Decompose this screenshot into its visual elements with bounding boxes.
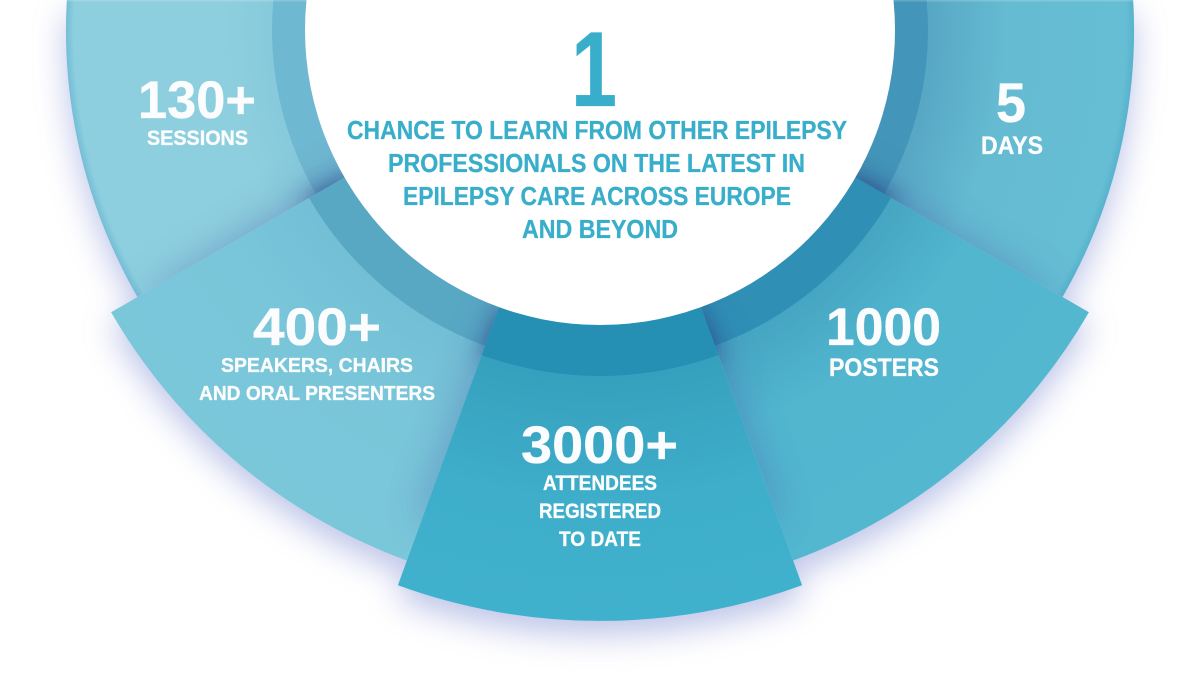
inner ring band (482, 302, 718, 376)
segment fill (66, 0, 400, 297)
panel: white centre circle (305, 0, 895, 325)
label line 2: REGISTERED (539, 500, 661, 523)
label posters: POSTERS (829, 354, 939, 382)
stat 1000: 1000 (826, 298, 941, 357)
panel: 1000 posters segment (701, 178, 1089, 560)
cast shadow from neighbouring segment (856, 162, 1051, 290)
panel: 3000+ attendees segment (398, 302, 802, 621)
label line 3: TO DATE (559, 528, 641, 551)
stat 3000+: 3000+ (521, 416, 678, 475)
circle (305, 0, 895, 325)
label sessions: SESSIONS (147, 127, 248, 150)
label line 1: SPEAKERS, CHAIRS (221, 355, 413, 377)
panel: 400+ speakers segment (111, 178, 499, 560)
top highlight (840, 0, 1134, 2)
inner ring band (272, 0, 400, 194)
inner ring band (800, 0, 928, 194)
label days: DAYS (981, 132, 1043, 160)
panel: 130+ sessions segment (66, 0, 344, 297)
label line 2: AND ORAL PRESENTERS (199, 383, 435, 405)
heading text: AND BEYOND (522, 214, 678, 244)
stat 130+: 130+ (138, 71, 256, 130)
segment fill (398, 302, 802, 621)
cast shadow from neighbouring segment (144, 159, 344, 292)
cast shadow from bottom segment (413, 302, 499, 522)
inner ring band (699, 175, 891, 346)
stat 1: 1 (571, 9, 617, 129)
segment fill (699, 175, 1089, 560)
heading text: CHANCE TO LEARN FROM OTHER EPILEPSY (347, 115, 847, 145)
heading text: PROFESSIONALS ON THE LATEST IN (388, 148, 805, 178)
label line 1: ATTENDEES (543, 472, 657, 495)
heading text: EPILEPSY CARE ACROSS EUROPE (403, 181, 791, 211)
segment fill (111, 175, 501, 560)
top highlight (66, 0, 366, 2)
panel: 5 days segment (856, 0, 1134, 297)
stat 400+: 400+ (253, 298, 381, 357)
cast shadow from bottom segment (701, 303, 786, 521)
stat 5: 5 (996, 71, 1026, 134)
heading text (347, 115, 847, 244)
inner ring band (309, 175, 501, 346)
segment fill (800, 0, 1134, 297)
